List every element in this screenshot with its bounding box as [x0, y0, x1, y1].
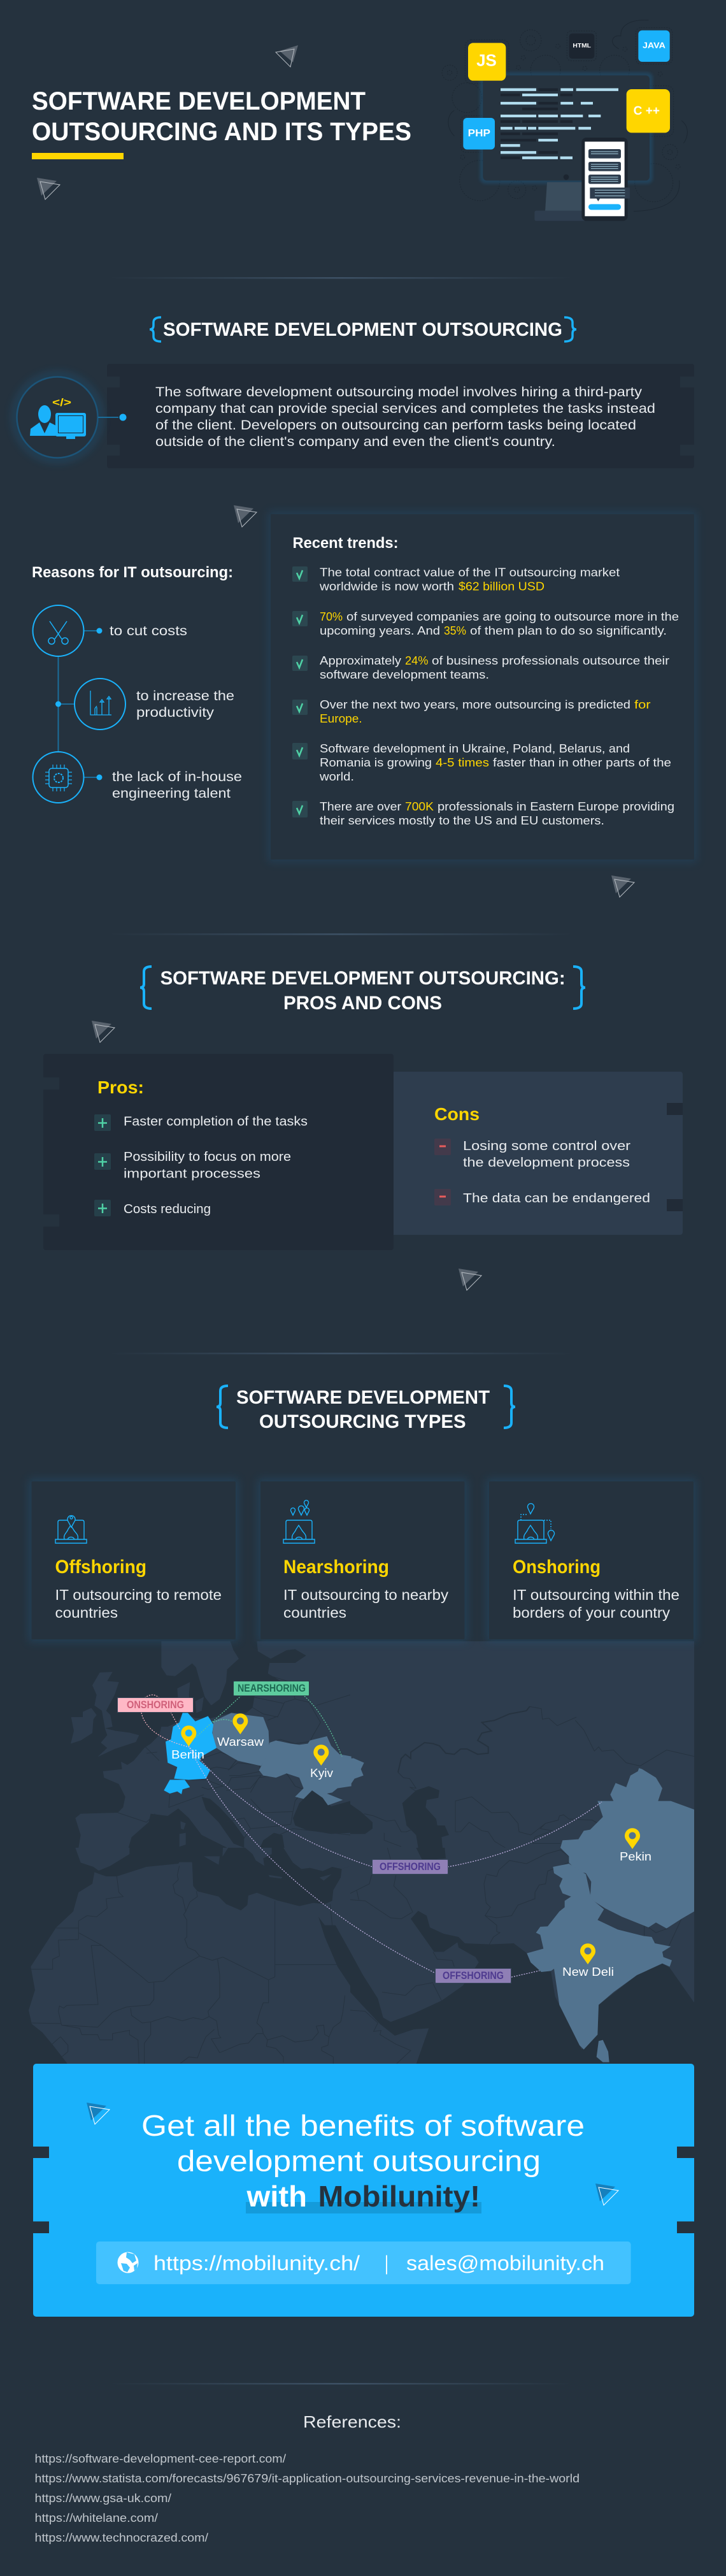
trend 5: faster than in other parts of the — [493, 756, 671, 769]
tag: nearshoring: NEARSHORING — [238, 1683, 306, 1694]
card: offshoring: Offshoring — [55, 1557, 146, 1578]
map: Europe, Africa and Asia — [29, 1641, 694, 2064]
contact bar — [96, 2241, 631, 2284]
title — [32, 87, 411, 146]
trend 1: The total contract value of the IT outsourcing market — [320, 566, 620, 579]
panel: pros: Pros: — [97, 1077, 144, 1097]
tag: nearshoring — [233, 1681, 310, 1696]
trend 1 — [292, 566, 620, 593]
card: offshoring — [29, 1479, 238, 1642]
city: Berlin: Berlin — [171, 1748, 204, 1761]
trend 4: Europe. — [320, 712, 362, 725]
trend 2: 70% — [320, 610, 343, 623]
references list: https://www.technocrazed.com/ — [34, 2531, 208, 2544]
city: Pekin: Pekin — [620, 1850, 651, 1863]
references list: https://www.statista.com/forecasts/967679/it-application-outsourcing-services-revenue-in-the-world — [34, 2472, 580, 2485]
trend 6: 700K — [405, 800, 434, 813]
city: New Deli: New Deli — [562, 1965, 614, 1978]
icon: nearshoring — [283, 1500, 315, 1543]
reason: lack of talent: the lack of in-house — [112, 770, 242, 784]
panel: cons — [394, 1072, 683, 1235]
call to action panel: Get all the benefits of software — [141, 2109, 585, 2142]
map land — [29, 1641, 694, 2064]
panel: definition text — [107, 364, 694, 468]
reason: productivity — [75, 679, 234, 730]
trend 3: Approximately — [320, 654, 402, 667]
trend 1: worldwide is now worth — [319, 580, 454, 593]
hero illustration: monitor with code and language tiles: PHP — [468, 128, 490, 139]
pro 2: Possibility to focus on more — [124, 1150, 291, 1164]
highlighted countries — [164, 1713, 694, 2062]
trend 6: their services mostly to the US and EU customers. — [320, 814, 604, 827]
trend 5 — [292, 742, 671, 783]
section heading: outsourcing types: OUTSOURCING TYPES — [259, 1411, 466, 1432]
trend 6: There are over — [320, 800, 401, 813]
routes — [141, 1695, 602, 1977]
section heading: pros and cons — [140, 967, 585, 1014]
panel: definition text: The software development outsourcing model involves hiring a third-party — [155, 385, 643, 399]
trend 3: 24% — [405, 654, 428, 667]
trend 5: Software development in Ukraine, Poland, Belarus, and — [320, 742, 630, 755]
panel: recent trends: Recent trends: — [293, 535, 399, 552]
call to action panel: development outsourcing — [177, 2145, 541, 2178]
section heading: pros and cons: SOFTWARE DEVELOPMENT OUTSOURCING: — [160, 968, 566, 989]
hero illustration: monitor with code and language tiles: JS — [476, 50, 497, 69]
trend 5: 4-5 times — [436, 756, 489, 769]
section heading: outsourcing types: SOFTWARE DEVELOPMENT — [236, 1387, 490, 1408]
card: nearshoring — [258, 1479, 467, 1642]
pro 1: Faster completion of the tasks — [124, 1115, 308, 1129]
con 1: Losing some control over — [463, 1139, 630, 1153]
deco triangle — [611, 875, 634, 897]
icon: developer at a monitor: </> — [52, 396, 71, 408]
section heading: outsourcing types — [217, 1386, 515, 1432]
reasons diagram — [33, 605, 242, 803]
tag: offshoring to New Deli: OFFSHORING — [443, 1970, 504, 1982]
tag: offshoring to Pekin — [372, 1859, 448, 1874]
pro 1 — [94, 1114, 308, 1131]
trend 2: of surveyed companies are going to outsource more in the — [346, 610, 679, 623]
city: Warsaw: Warsaw — [217, 1735, 264, 1748]
references heading: References: — [303, 2412, 401, 2431]
trend 4: for — [634, 698, 651, 711]
call to action panel: Mobilunity! — [318, 2180, 480, 2213]
card: offshoring: IT outsourcing to remote — [55, 1587, 222, 1603]
pro 3: Costs reducing — [124, 1202, 211, 1216]
contact bar: | — [385, 2252, 388, 2275]
card: onshoring: borders of your country — [513, 1604, 671, 1621]
hero illustration: monitor with code and language tiles — [442, 20, 687, 221]
deco triangle — [595, 2184, 618, 2205]
reason: cut costs: to cut costs — [110, 624, 187, 638]
pin: Kyiv — [313, 1745, 329, 1766]
reason: productivity: to increase the — [136, 689, 234, 703]
deco triangle — [37, 178, 60, 199]
trend 6 — [292, 800, 674, 827]
con 1 — [434, 1139, 630, 1170]
references list: https://whitelane.com/ — [34, 2512, 158, 2524]
icon: onshoring — [515, 1504, 554, 1543]
deco triangle — [276, 45, 298, 67]
title: SOFTWARE DEVELOPMENT — [32, 87, 366, 115]
deco triangle — [459, 1269, 481, 1290]
icon: globe — [117, 2252, 139, 2273]
trend 4 — [292, 698, 651, 725]
reason: cut costs — [33, 605, 187, 656]
trend 3: software development teams. — [320, 668, 489, 681]
tag: offshoring to New Deli — [435, 1968, 511, 1983]
trend 2 — [292, 610, 679, 637]
icon: developer at a monitor — [15, 375, 126, 459]
deco triangle — [92, 1021, 115, 1042]
card: nearshoring: IT outsourcing to nearby — [283, 1587, 449, 1603]
tag: offshoring to Pekin: OFFSHORING — [380, 1861, 441, 1873]
panel: definition text: company that can provide special services and completes the tasks instead — [155, 401, 655, 416]
tag: onshoring: ONSHORING — [127, 1699, 184, 1711]
card: onshoring: IT outsourcing within the — [513, 1587, 680, 1603]
icon: offshoring — [55, 1513, 87, 1543]
trend 2: of them plan to do so significantly. — [470, 624, 667, 637]
city: Kyiv: Kyiv — [310, 1766, 334, 1780]
card: onshoring: Onshoring — [513, 1557, 601, 1578]
reason: lack of talent: engineering talent — [112, 786, 231, 801]
panel: pros — [43, 1054, 394, 1250]
trend 5: world. — [319, 770, 354, 783]
deco triangle — [87, 2103, 110, 2124]
call to action panel — [33, 2064, 694, 2317]
contact bar: sales@mobilunity.ch — [406, 2252, 604, 2275]
pro 2 — [94, 1150, 291, 1181]
references list — [34, 2452, 580, 2544]
contact bar: https://mobilunity.ch/ — [153, 2252, 360, 2275]
card: offshoring: countries — [55, 1604, 118, 1621]
trend 3: of business professionals outsource their — [432, 654, 669, 667]
trend 2: upcoming years. And — [320, 624, 440, 637]
trend 5: Romania is growing — [320, 756, 432, 769]
pro 3 — [94, 1200, 211, 1216]
section heading: pros and cons: PROS AND CONS — [283, 993, 442, 1014]
panel: recent trends — [268, 512, 697, 862]
pin: New Deli — [580, 1943, 595, 1964]
map seas — [129, 1786, 694, 2064]
panel: definition text: outside of the client's company and even the client's country. — [155, 435, 555, 449]
title: OUTSOURCING AND ITS TYPES — [32, 118, 411, 146]
reason: lack of talent — [33, 752, 242, 803]
pin: Berlin — [181, 1725, 196, 1746]
call to action panel: with — [246, 2180, 307, 2213]
trend 2: 35% — [444, 624, 466, 637]
references list: https://www.gsa-uk.com/ — [34, 2492, 171, 2505]
pin: Pekin — [625, 1828, 640, 1849]
panel: definition text: of the client. Developers on outsourcing can perform tasks being located — [155, 418, 636, 433]
section heading: software development outsourcing: SOFTWARE DEVELOPMENT OUTSOURCING — [163, 319, 562, 340]
heading: reasons: Reasons for IT outsourcing: — [32, 564, 233, 581]
con 1: the development process — [463, 1156, 630, 1170]
title underline — [32, 153, 124, 159]
pro 2: important processes — [124, 1167, 260, 1181]
trend 6: professionals in Eastern Europe providing — [438, 800, 674, 813]
reason: productivity: productivity — [136, 705, 215, 720]
hero illustration: monitor with code and language tiles: C ++ — [634, 104, 660, 118]
trend 3 — [292, 654, 669, 681]
references list: https://software-development-cee-report.com/ — [34, 2452, 286, 2465]
card: nearshoring: Nearshoring — [283, 1557, 389, 1578]
card: nearshoring: countries — [283, 1604, 346, 1621]
con 2: The data can be endangered — [463, 1191, 650, 1205]
trend 1: $62 billion USD — [459, 580, 544, 593]
tag: onshoring — [117, 1697, 194, 1713]
hero illustration: monitor with code and language tiles: HTML — [573, 42, 592, 48]
deco triangle — [234, 505, 257, 527]
card: onshoring — [487, 1479, 696, 1642]
panel: cons: Cons — [434, 1104, 480, 1124]
hero illustration: monitor with code and language tiles: JAVA — [643, 41, 666, 50]
pin: Warsaw — [232, 1713, 248, 1734]
con 2 — [434, 1189, 650, 1205]
trend 4: Over the next two years, more outsourcing is predicted — [320, 698, 630, 711]
